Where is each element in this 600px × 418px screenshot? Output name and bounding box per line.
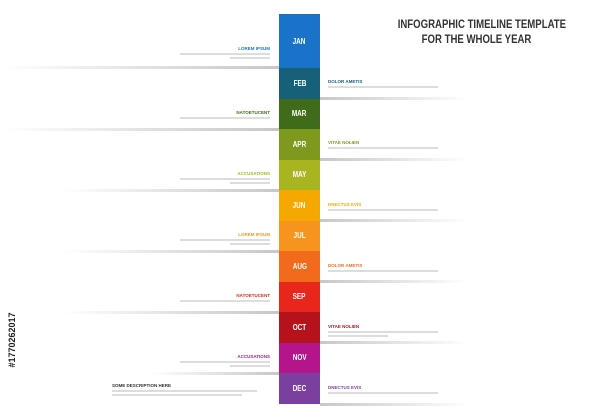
text: DNECTUS EVIS (328, 202, 361, 207)
title (398, 17, 566, 46)
timeline column: APR (293, 140, 306, 149)
text: VITAE NOLIEN (328, 140, 359, 145)
timeline column: MAR (292, 109, 307, 118)
timeline column: JAN (293, 36, 306, 46)
timeline column: FEB (293, 79, 306, 88)
description: SOME DESCRIPTION HERE (112, 383, 171, 388)
text: VITAE NOLIEN (328, 324, 359, 329)
text: LOREM IPSUM (238, 232, 270, 237)
text: ACCUSATIONS (237, 354, 270, 359)
timeline column: OCT (293, 323, 306, 332)
timeline column: NOV (293, 353, 306, 362)
timeline column: SEP (293, 292, 306, 301)
timeline column: AUG (292, 262, 307, 271)
text: DOLOR AMETIS (328, 79, 362, 84)
text: LOREM IPSUM (238, 46, 270, 51)
text: DNECTUS EVIS (328, 385, 361, 390)
shadow lines (42, 66, 447, 406)
text: NATOETUCENT (236, 293, 270, 298)
title: FOR THE WHOLE YEAR (422, 32, 531, 46)
timeline column: MAY (293, 170, 306, 179)
timeline column: JUL (293, 231, 306, 240)
labels (180, 46, 438, 394)
title: INFOGRAPHIC TIMELINE TEMPLATE (398, 17, 566, 31)
timeline column (279, 14, 320, 404)
text: ACCUSATIONS (237, 171, 270, 176)
side watermark text: #177026201​7 (7, 312, 17, 368)
text: NATOETUCENT (236, 110, 270, 115)
text: DOLOR AMETIS (328, 263, 362, 268)
timeline column: JUN (293, 201, 306, 210)
timeline column: DEC (293, 384, 306, 393)
